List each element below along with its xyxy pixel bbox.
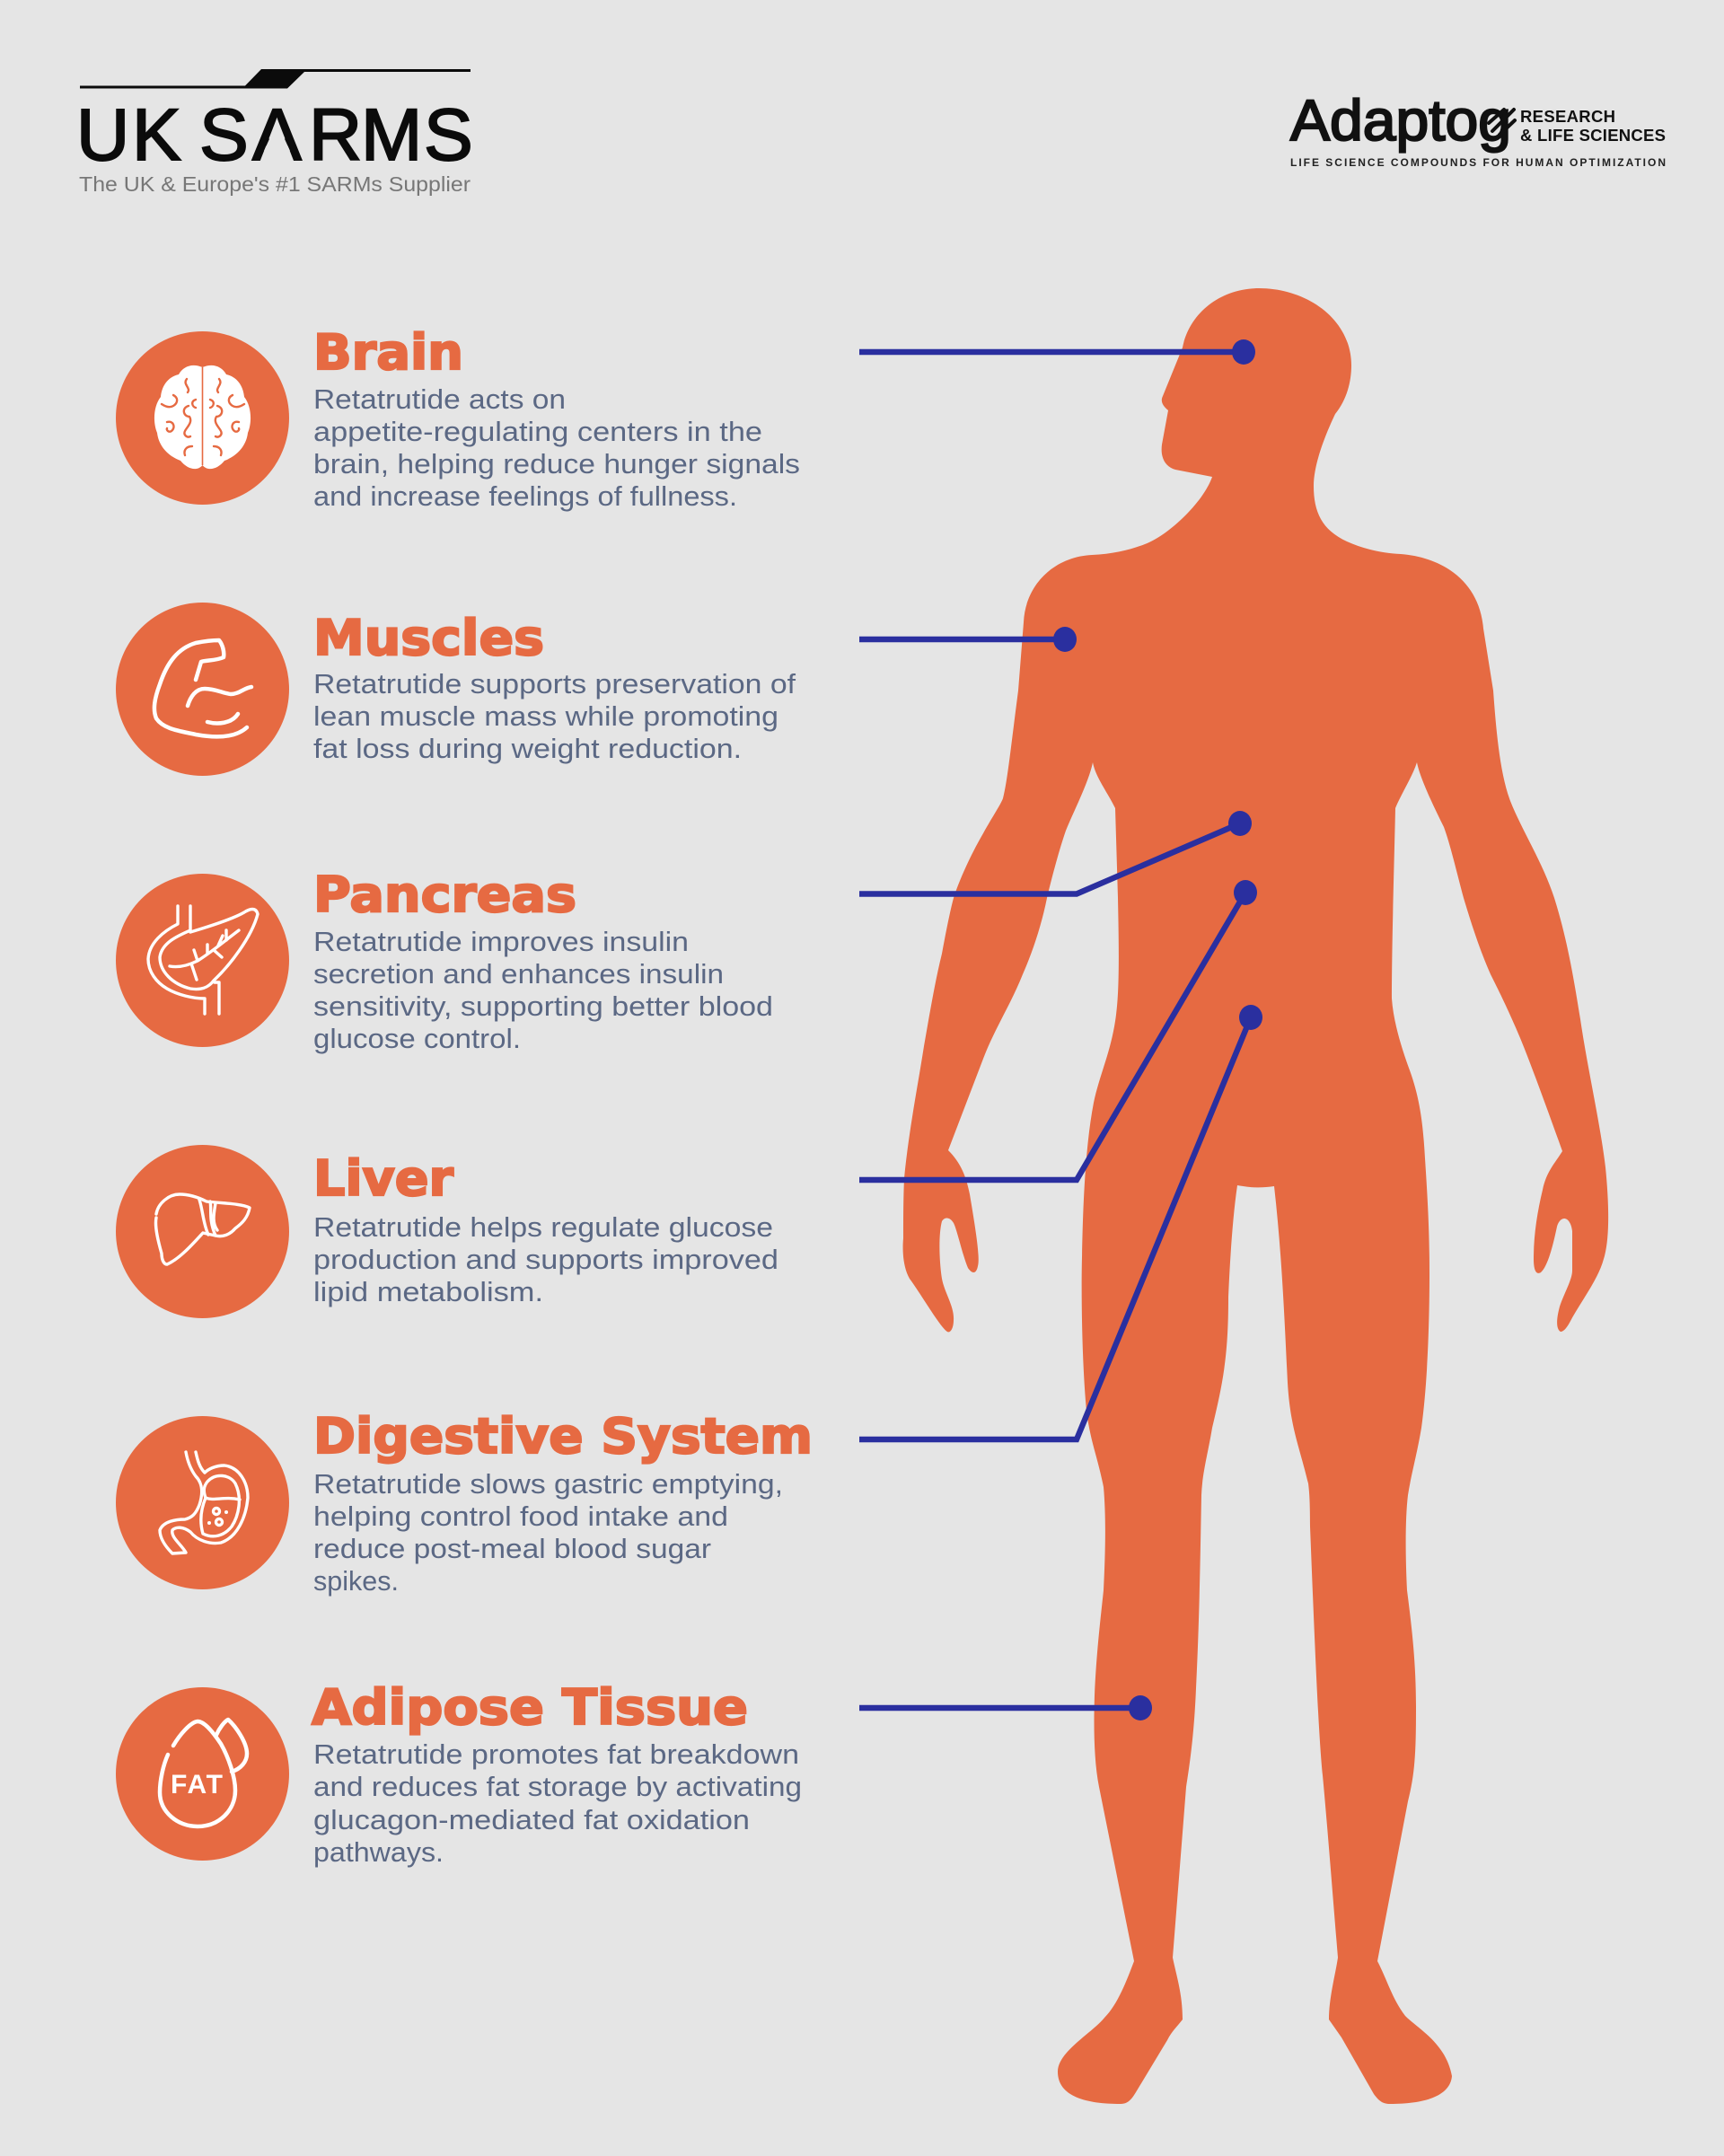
text block: brain description: brain, helping reduce hunger signals [313, 448, 800, 480]
text block: adipose description: and reduces fat storage by activating [313, 1771, 802, 1802]
text block: digestive description: Retatrutide slows gastric emptying, [313, 1468, 783, 1500]
callout line: adipose tissue [859, 1695, 1152, 1720]
logo wordmark: UK SARMS [76, 94, 473, 176]
logo division name: RESEARCH [1520, 107, 1615, 126]
callout line: muscles [859, 627, 1077, 652]
text block: brain description: Retatrutide acts on [313, 383, 566, 415]
text block: brain description [313, 383, 800, 512]
callout line: pancreas [859, 811, 1252, 894]
icon: flexed arm [116, 603, 289, 776]
logo: UK SARMS [76, 69, 473, 196]
heading: Muscles: Muscles [313, 610, 544, 666]
panel: digestive system [116, 1408, 813, 1597]
text block: pancreas description: sensitivity, supporting better blood [313, 990, 773, 1022]
panel: liver [116, 1145, 778, 1318]
icon: liver [116, 1145, 289, 1318]
text block: liver description: lipid metabolism. [313, 1276, 543, 1307]
panel: brain [116, 324, 800, 512]
text block: muscles description: lean muscle mass while promoting [313, 700, 778, 732]
text block: adipose description [313, 1738, 802, 1868]
heading: Digestive System: Digestive System [313, 1408, 813, 1465]
logo mark strokes [1489, 110, 1515, 135]
icon: pancreas [116, 874, 289, 1047]
heading: Adipose Tissue: Adipose Tissue [312, 1679, 748, 1736]
text block: adipose description: glucagon-mediated fat oxidation [313, 1804, 750, 1835]
callout line: brain [859, 339, 1255, 365]
heading: Brain: Brain [313, 324, 463, 381]
icon: brain [116, 331, 289, 505]
logo wordmark: Adaptog [1290, 88, 1511, 153]
text block: adipose description: pathways. [313, 1836, 444, 1868]
text block: liver description [313, 1211, 778, 1307]
icon: fat drops [116, 1687, 289, 1861]
text block: pancreas description [313, 926, 773, 1054]
text block: digestive description: reduce post-meal blood sugar [313, 1533, 711, 1564]
text block: brain description: and increase feelings of fullness. [313, 480, 737, 512]
callout line: liver [859, 880, 1257, 1180]
text block: muscles description: Retatrutide supports preservation of [313, 668, 796, 700]
logo: Adaptog Research & Life Sciences [1290, 88, 1666, 169]
text block: digestive description [313, 1468, 783, 1597]
human body silhouette [903, 288, 1608, 2104]
heading: Liver: Liver [313, 1150, 453, 1207]
panel: adipose tissue [116, 1679, 802, 1868]
logo mark: line and parallelogram [80, 69, 471, 88]
logo strapline: LIFE SCIENCE COMPOUNDS FOR HUMAN OPTIMIZATION [1290, 156, 1666, 169]
text block: digestive description: spikes. [313, 1565, 399, 1597]
text block: liver description: Retatrutide helps regulate glucose [313, 1211, 773, 1243]
text block: pancreas description: glucose control. [313, 1023, 521, 1054]
logo tagline: The UK & Europe's #1 SARMs Supplier [79, 172, 471, 196]
text block: pancreas description: Retatrutide improves insulin [313, 926, 689, 957]
logo division name second line: & LIFE SCIENCES [1520, 126, 1666, 145]
panel: pancreas [116, 867, 773, 1054]
text block: liver description: production and supports improved [313, 1244, 778, 1275]
text block: brain description: appetite-regulating centers in the [313, 416, 762, 447]
text block: adipose description: Retatrutide promotes fat breakdown [313, 1738, 799, 1770]
text block: muscles description [313, 668, 796, 764]
icon: stomach [116, 1416, 289, 1589]
heading: Pancreas: Pancreas [313, 867, 576, 923]
text block: muscles description: fat loss during weight reduction. [313, 733, 742, 764]
logo wordmark: open A counter [264, 131, 290, 151]
panel: muscles [116, 603, 796, 776]
callout line: digestive system [859, 1005, 1262, 1439]
text block: pancreas description: secretion and enhances insulin [313, 958, 724, 990]
text block: digestive description: helping control food intake and [313, 1500, 728, 1532]
icon label: FAT [171, 1770, 223, 1800]
